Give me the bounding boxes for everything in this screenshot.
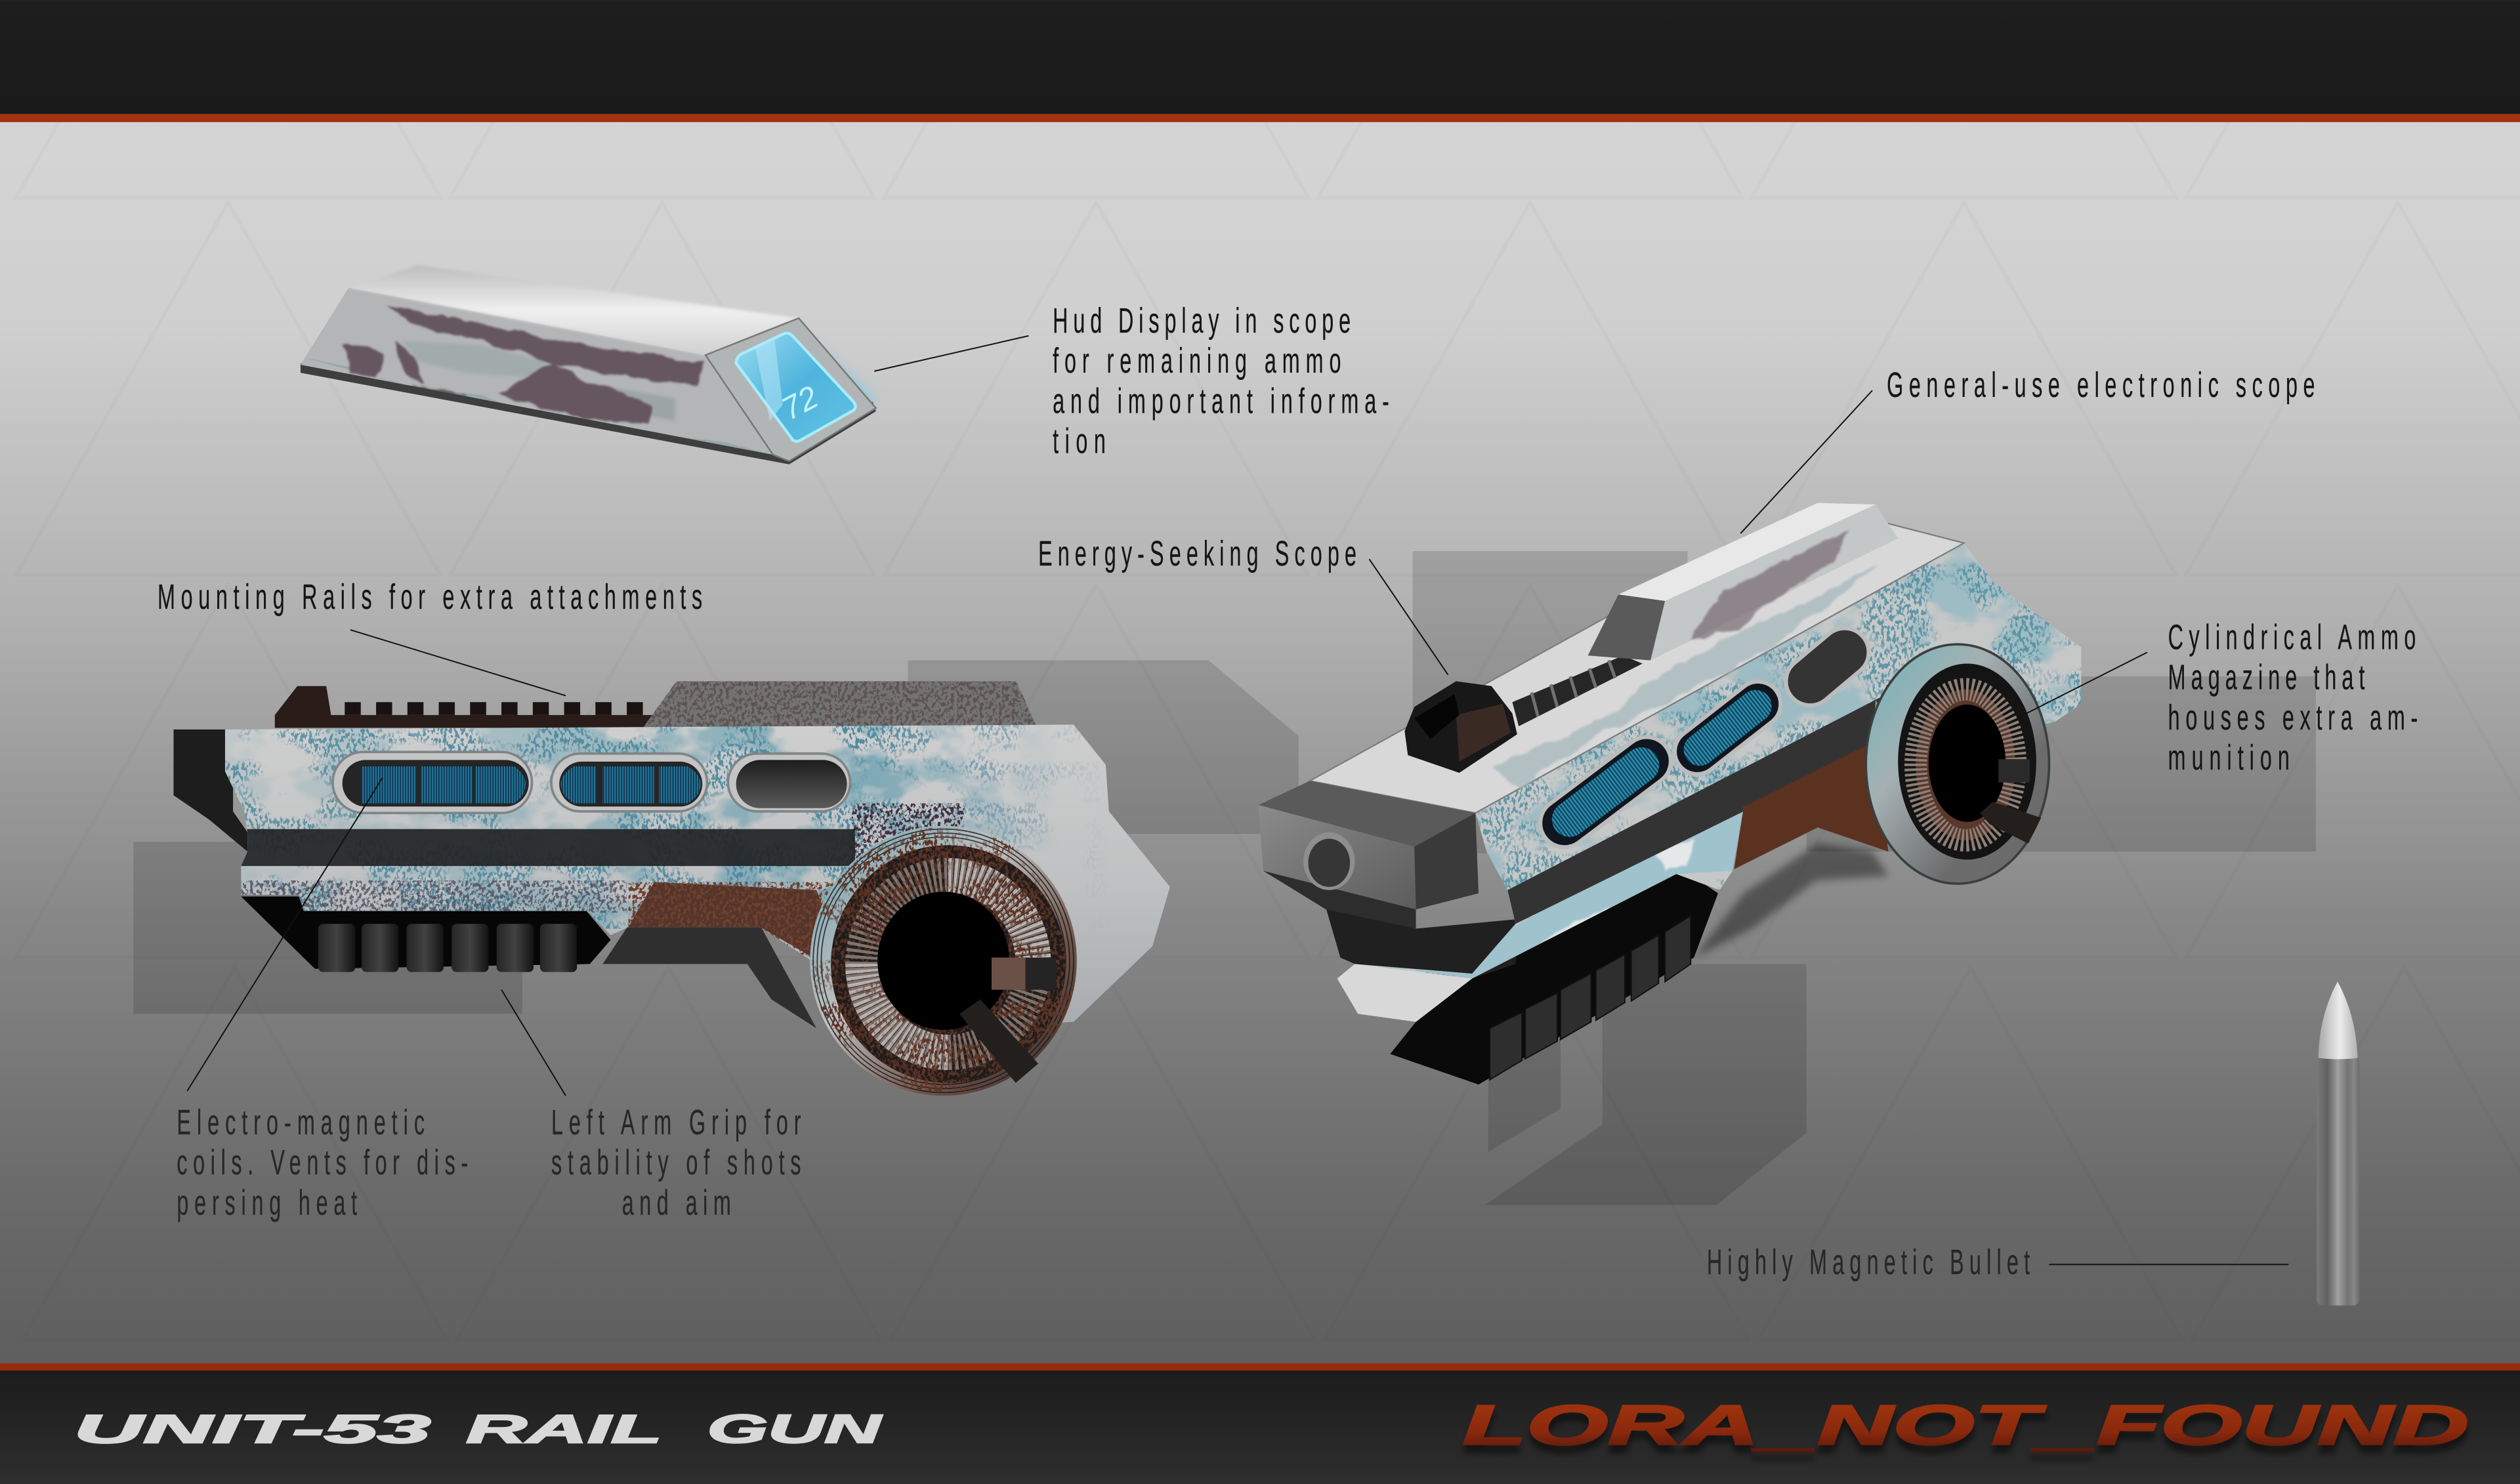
under bridge	[602, 926, 816, 1028]
illustration: side view rail gun	[173, 681, 1181, 1096]
label: arm grip	[551, 1103, 801, 1223]
title: GUN	[707, 1407, 883, 1451]
top face patch	[1495, 566, 1880, 787]
label: arm grip: and aim	[622, 1184, 731, 1223]
dark under muzzle	[1326, 908, 1519, 978]
illustration: scope attachment	[289, 265, 876, 466]
rust panel	[629, 882, 822, 955]
vent 2 with coils	[551, 754, 707, 812]
top bar	[0, 0, 2520, 122]
bullet nose	[2319, 981, 2358, 1060]
dark band	[241, 829, 855, 866]
label: ammo magazine: Magazine that	[2168, 658, 2365, 697]
leader line: coils	[187, 777, 383, 1091]
mounting rail	[275, 686, 654, 728]
vent 1 with coils	[333, 752, 532, 813]
title: UNIT-53	[74, 1407, 430, 1451]
rust panel	[1734, 742, 1889, 869]
label: bullet: Highly Magnetic Bullet	[1707, 1243, 2030, 1282]
illustration: magnetic bullet	[2317, 981, 2359, 1306]
label: hud display: for remaining ammo	[1053, 342, 1341, 381]
bottom bar	[0, 1363, 2520, 1484]
leader line: energy scope	[1370, 559, 1448, 675]
label: hud display: Hud Display in scope	[1053, 302, 1351, 340]
ammo ring	[1866, 644, 2049, 884]
scope glow	[812, 340, 876, 421]
leader line: general scope	[1740, 390, 1872, 533]
electronic scope	[1588, 503, 1898, 661]
leader line: ammo magazine	[2017, 652, 2147, 718]
label: hud display: tion	[1053, 422, 1106, 461]
body side	[1337, 544, 2082, 1022]
hud screen glare	[755, 339, 783, 421]
bullet casing	[2317, 1058, 2359, 1306]
label: energy scope: Energy-Seeking Scope	[1038, 535, 1356, 573]
leader line: hud display	[874, 336, 1028, 371]
grip ridges	[1490, 916, 1690, 1080]
label: ammo magazine: munition	[2168, 739, 2290, 777]
watermark logo: left	[133, 661, 1299, 1014]
drop shadow	[1694, 844, 1889, 958]
label: ammo magazine: Cylindrical Ammo	[2168, 618, 2416, 657]
scope base	[301, 363, 876, 464]
scope housing	[643, 681, 1037, 728]
scope side	[301, 287, 772, 455]
label: hud display	[1053, 302, 1389, 461]
leader line: mounting rails	[350, 630, 566, 695]
muzzle block	[1259, 781, 1479, 929]
rail on top	[1310, 518, 1964, 813]
hud screen	[736, 333, 856, 442]
brand mark: LORA_NOT_FOUND	[1463, 1394, 2469, 1457]
label: coils: Electro-magnetic	[177, 1103, 425, 1142]
scope front	[705, 318, 876, 461]
label: mounting rails: Mounting Rails for extra attachments	[158, 578, 702, 617]
vents	[1530, 619, 1879, 857]
energy-seeking scope	[1404, 681, 1517, 773]
vent 3 empty	[728, 754, 850, 812]
label: coils	[177, 1103, 468, 1223]
ammo ring	[810, 826, 1077, 1096]
label: ammo magazine: houses extra am-	[2168, 699, 2418, 737]
highlighted fins	[863, 876, 1034, 1052]
grip underside	[1390, 865, 1718, 1084]
label: coils: coils. Vents for dis-	[177, 1144, 468, 1182]
leader line: arm grip	[501, 990, 566, 1096]
leader line: bullet	[2049, 1264, 2288, 1265]
title: RAIL	[466, 1407, 662, 1451]
grips	[318, 924, 577, 972]
rail teeth	[1512, 655, 1643, 726]
label: general scope: General-use electronic scope	[1887, 366, 2315, 405]
dark band	[1507, 697, 1880, 924]
scope top	[348, 265, 799, 355]
body	[217, 720, 1181, 1041]
rear block	[173, 730, 247, 852]
label: arm grip: stability of shots	[551, 1144, 801, 1182]
lower black rail	[241, 897, 611, 969]
illustration: angled view rail gun	[1259, 503, 2105, 1084]
lower strip	[1415, 812, 1743, 979]
hud ammo number: 72	[776, 379, 824, 427]
watermark logo: right	[1413, 551, 2316, 1205]
label: ammo magazine	[2168, 618, 2418, 777]
purple stain	[852, 804, 964, 867]
label: coils: persing heat	[177, 1184, 358, 1223]
label: arm grip: Left Arm Grip for	[551, 1103, 801, 1142]
label: hud display: and important informa-	[1053, 382, 1389, 421]
